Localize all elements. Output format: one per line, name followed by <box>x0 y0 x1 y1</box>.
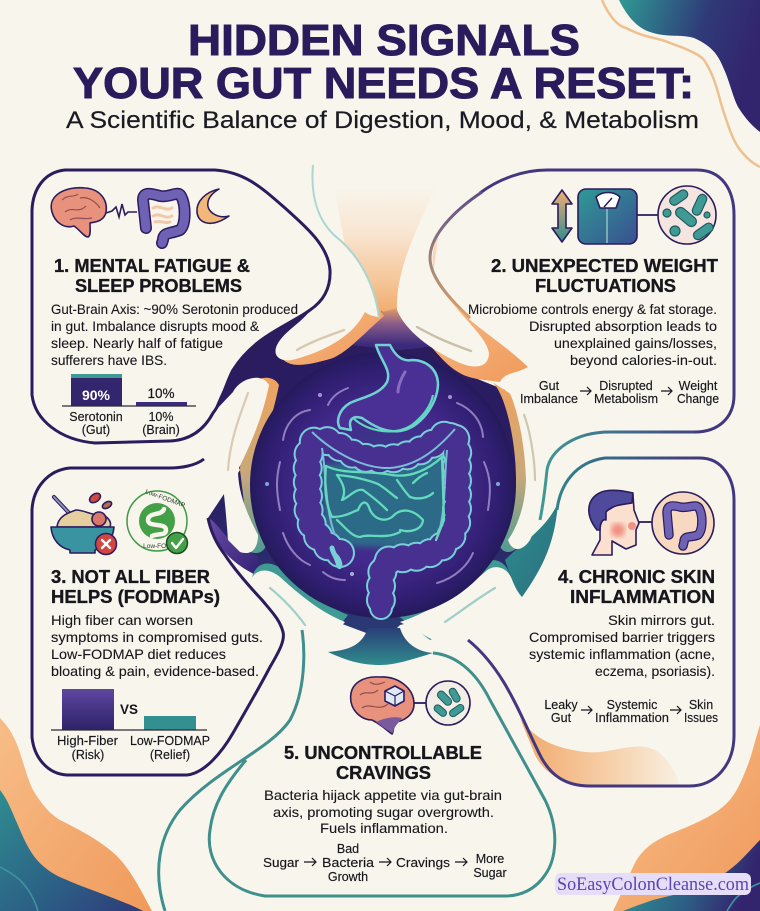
panel: 2 unexpected weight fluctuations <box>430 170 734 520</box>
body text <box>468 301 717 368</box>
flow: leaky gut to skin issues: Issues <box>684 711 718 725</box>
flow: sugar cycle: Growth <box>328 870 368 884</box>
bar chart: high-fiber vs low-FODMAP: Low-FODMAP <box>130 734 210 748</box>
icon: arrows, scale and bacteria <box>552 186 716 244</box>
heading <box>558 567 715 607</box>
heading: 1. MENTAL FATIGUE & <box>54 256 250 276</box>
flow: gut imbalance to weight change: Weight <box>679 379 718 393</box>
body text: Gut-Brain Axis: ~90% Serotonin produced <box>51 301 298 317</box>
flow: gut imbalance to weight change: Change <box>677 392 719 406</box>
body text: bloating & pain, evidence-based. <box>51 663 259 679</box>
panel: 3 not all fiber helps <box>32 459 283 775</box>
orange wash inside panel 4 <box>520 718 680 785</box>
bar chart: serotonin: 10% <box>147 386 175 401</box>
heading: 3. NOT ALL FIBER <box>51 567 210 587</box>
flow: gut imbalance to weight change: Disrupted <box>599 379 653 393</box>
flow: leaky gut to skin issues: Systemic <box>607 698 657 712</box>
bar chart: high-fiber vs low-FODMAP: High-Fiber <box>57 734 118 748</box>
flow: leaky gut to skin issues: Skin <box>689 698 713 712</box>
title: YOUR GUT NEEDS A RESET: <box>73 59 694 108</box>
body text: Low-FODMAP diet reduces <box>51 646 226 662</box>
bar chart: high-fiber vs low-FODMAP <box>51 689 210 762</box>
bar chart: high-fiber vs low-FODMAP: (Risk) <box>72 748 104 762</box>
bar chart: serotonin <box>62 374 196 437</box>
body text <box>264 787 502 836</box>
panel 4 outline <box>468 458 734 786</box>
flow: gut imbalance to weight change <box>520 379 719 406</box>
body text: beyond calories-in-out. <box>570 352 717 368</box>
icon: glowing gut illustration <box>308 345 457 608</box>
heading <box>51 567 220 607</box>
panel 1 outline <box>32 170 330 443</box>
flow: sugar cycle: Sugar <box>263 856 299 870</box>
body text: Microbiome controls energy & fat storage. <box>468 301 717 317</box>
body text <box>51 612 263 679</box>
body text: Compromised barrier triggers <box>529 629 715 645</box>
panel: 1 mental fatigue and sleep <box>32 170 330 443</box>
icon: face and colon <box>589 490 714 555</box>
flow: sugar cycle: Bad <box>337 842 359 856</box>
icon: bowl and low-FODMAP badge: Low-FODMAP <box>144 488 186 509</box>
icon: bowl and low-FODMAP badge: Low-FOD <box>143 543 171 550</box>
body text: High fiber can worsen <box>51 612 193 628</box>
heading: 2. UNEXPECTED WEIGHT <box>491 256 718 276</box>
body text: Bacteria hijack appetite via gut-brain <box>264 787 502 803</box>
heading: FLUCTUATIONS <box>535 276 676 296</box>
bar chart: serotonin: Serotonin <box>69 410 123 424</box>
heading: INFLAMMATION <box>570 587 715 607</box>
bar chart: high-fiber vs low-FODMAP: (Relief) <box>150 748 190 762</box>
bar chart: serotonin: 10% <box>148 410 174 424</box>
flow: leaky gut to skin issues: Gut <box>551 711 572 725</box>
panel 2 outline <box>430 170 734 520</box>
icon: brain with sugar cube and bacteria <box>351 677 470 734</box>
body text: eczema, psoriasis). <box>595 663 715 679</box>
panel 5 outline <box>159 630 555 911</box>
body text <box>529 612 715 679</box>
flow: gut imbalance to weight change: Imbalance <box>520 392 578 406</box>
corner wave: bottom left <box>0 718 152 911</box>
bar chart: serotonin: (Gut) <box>82 423 110 437</box>
watermark: SoEasyColonCleanse.com <box>557 874 749 895</box>
small intestine coils <box>325 457 444 540</box>
bar chart: high-fiber vs low-FODMAP: VS <box>120 701 138 717</box>
body text: Disrupted absorption leads to <box>529 318 717 334</box>
body text: unexplained gains/losses, <box>554 335 717 351</box>
heading <box>284 743 482 783</box>
heading: 5. UNCONTROLLABLE <box>284 743 482 763</box>
corner wave: bottom right <box>613 725 760 911</box>
flow: sugar cycle: Bacteria <box>322 856 374 870</box>
panel: 4 chronic skin inflammation <box>468 458 734 786</box>
heading: HELPS (FODMAPs) <box>51 587 220 607</box>
flow: sugar cycle <box>263 842 507 884</box>
panel 3 outline <box>32 459 283 775</box>
heading: CRAVINGS <box>336 763 431 783</box>
icon: brain, gut wave and moon <box>51 188 229 243</box>
panel: 5 uncontrollable cravings <box>159 630 555 911</box>
subtitle: A Scientific Balance of Digestion, Mood, & Metabolism <box>66 107 699 134</box>
heading <box>491 256 718 296</box>
bar chart: serotonin: 90% <box>82 387 111 403</box>
body text: symptoms in compromised guts. <box>51 629 263 645</box>
flow: sugar cycle: Cravings <box>396 856 450 870</box>
body text: Skin mirrors gut. <box>608 612 715 628</box>
body text: Fuels inflammation. <box>320 820 448 836</box>
title: HIDDEN SIGNALS <box>188 16 580 65</box>
corner wave: top right <box>602 0 760 167</box>
body text: axis, promoting sugar overgrowth. <box>273 804 494 820</box>
flow: sugar cycle: Sugar <box>473 866 507 880</box>
flow: gut imbalance to weight change: Metabolism <box>594 392 658 406</box>
central hub: body, channels and gut illustration <box>208 165 558 665</box>
flow: sugar cycle: More <box>476 852 504 866</box>
energy arcs and dots <box>265 388 500 583</box>
flow: leaky gut to skin issues <box>544 698 718 725</box>
heading: SLEEP PROBLEMS <box>75 276 242 296</box>
body text <box>51 301 298 368</box>
title <box>73 16 694 108</box>
body text: systemic inflammation (acne, <box>529 646 715 662</box>
body text: in gut. Imbalance disrupts mood & <box>51 318 260 334</box>
body text: sufferers have IBS. <box>51 352 167 368</box>
flow: leaky gut to skin issues: Leaky <box>544 698 578 712</box>
flow: leaky gut to skin issues: Inflammation <box>595 711 669 725</box>
heading <box>54 256 250 296</box>
flow: gut imbalance to weight change: Gut <box>539 379 560 393</box>
body text: sleep. Nearly half of fatigue <box>51 335 223 351</box>
icon: bowl and low-FODMAP badge <box>51 488 188 554</box>
heading: 4. CHRONIC SKIN <box>558 567 715 587</box>
bar chart: serotonin: (Brain) <box>142 423 180 437</box>
